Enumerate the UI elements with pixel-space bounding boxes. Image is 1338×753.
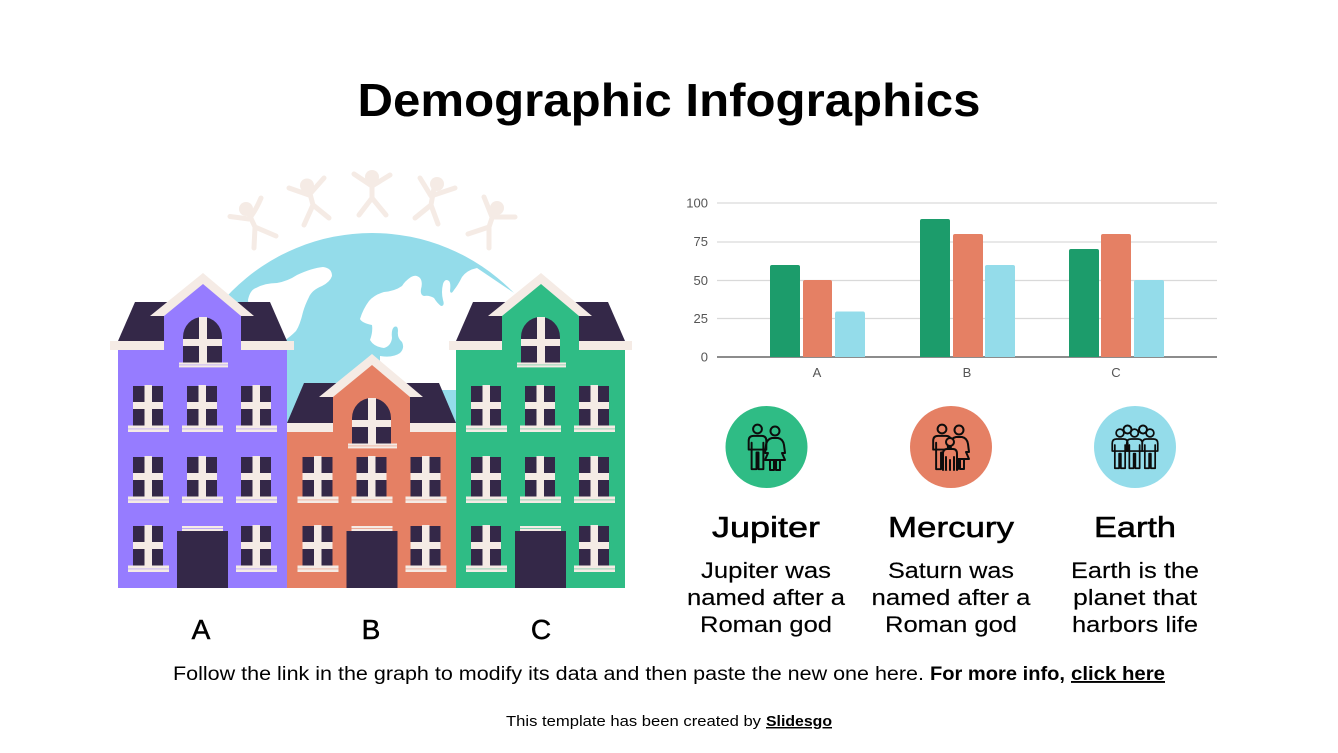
bars: group B [920, 219, 1015, 357]
column: Mercury: named after a [872, 585, 1031, 610]
credit line: This template has been created by [506, 714, 762, 730]
continent: right landmass [360, 268, 520, 390]
y axis labels [686, 196, 708, 364]
x axis labels [813, 365, 1121, 380]
y axis labels: 25 [694, 311, 708, 326]
figure 3 [354, 170, 390, 215]
x axis labels: C [1111, 365, 1121, 380]
people figures [230, 170, 515, 248]
note: follow the link: click here [1071, 664, 1165, 685]
column: Jupiter [687, 512, 846, 637]
bars: group C [1069, 234, 1164, 357]
column: Mercury: Saturn was [888, 558, 1014, 583]
column: Earth [1071, 512, 1199, 637]
column: Mercury: Mercury [888, 512, 1015, 544]
y axis labels: 75 [694, 234, 708, 249]
column: Earth: Earth [1094, 512, 1176, 544]
column: Earth: Earth is the [1071, 558, 1199, 583]
building labels: A [192, 614, 211, 645]
x axis labels: B [963, 365, 971, 380]
credit line: Slidesgo [766, 714, 832, 730]
column: Jupiter: Jupiter was [701, 558, 831, 583]
globe illustration [228, 233, 514, 423]
icon: couple [726, 406, 808, 488]
note: follow the link [173, 664, 1165, 685]
column: Jupiter: Roman god [700, 612, 832, 637]
figure 4 [415, 177, 455, 224]
icon: family [910, 406, 992, 488]
note: follow the link: For more info, [930, 664, 1065, 685]
building B (coral) [287, 354, 456, 588]
y axis labels: 100 [686, 196, 708, 210]
note: follow the link: Follow the link in the graph to modify its data and then paste the new one here. [173, 664, 924, 685]
column: Mercury: Roman god [885, 612, 1017, 637]
title: Demographic Infographics [358, 74, 980, 126]
building A (purple) [110, 273, 294, 588]
building labels [192, 614, 551, 645]
column: Earth: harbors life [1072, 612, 1198, 637]
building C (green) [449, 273, 632, 588]
continent: left landmass [248, 267, 332, 340]
column: Jupiter: named after a [687, 585, 846, 610]
figure 5 [468, 197, 515, 248]
y axis labels: 0 [701, 350, 708, 364]
building labels: C [531, 614, 551, 645]
x axis labels: A [813, 365, 822, 380]
icon: group of people [1094, 406, 1176, 488]
figure 2 [289, 178, 329, 225]
column: Earth: planet that [1073, 585, 1198, 610]
figure 1 [230, 198, 276, 248]
building labels: B [362, 614, 380, 645]
credit line [506, 714, 832, 730]
column: Jupiter: Jupiter [712, 512, 820, 544]
column: Mercury [872, 512, 1031, 637]
bars: group A [770, 265, 865, 357]
bar chart [686, 196, 1217, 380]
y axis labels: 50 [694, 273, 708, 288]
